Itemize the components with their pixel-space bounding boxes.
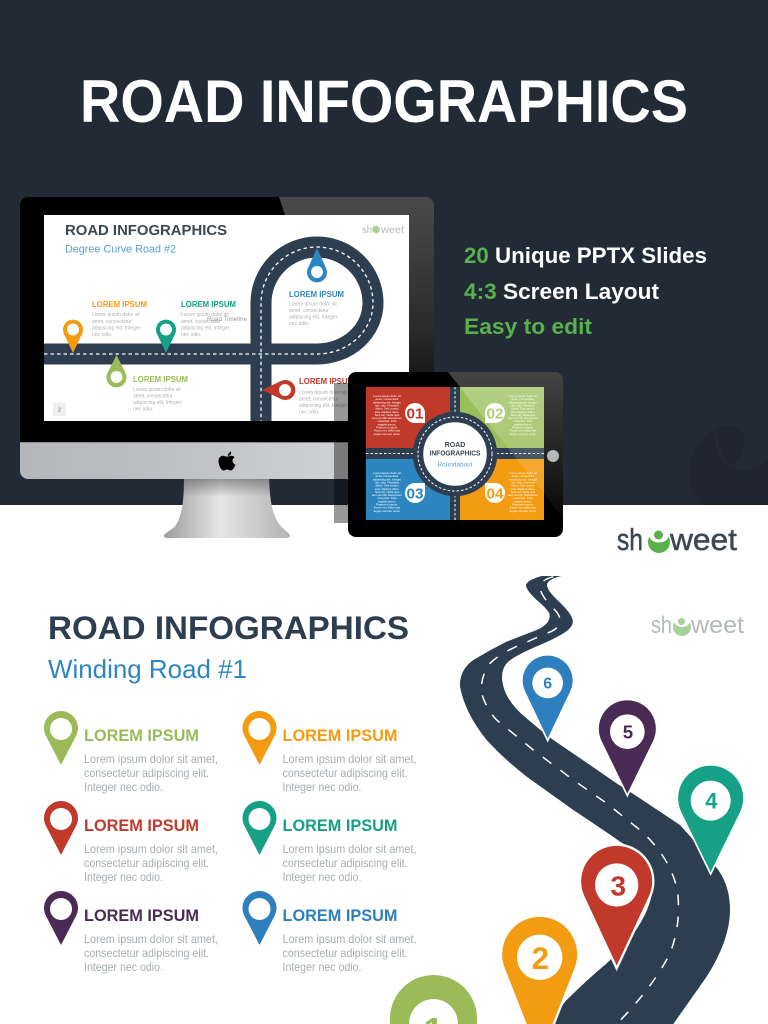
- label: blue: LOREM IPSUM: [289, 290, 344, 299]
- quadrant: green: [455, 387, 544, 454]
- roundabout title: INFOGRAPHICS: [430, 450, 481, 458]
- winding road: [460, 576, 730, 1024]
- page number: 2: [58, 408, 61, 414]
- legend item: blue: Lorem ipsum dolor sit amet,: [282, 932, 416, 946]
- quadrant text: blue: nec odio. Praesent: [375, 480, 399, 484]
- quadrant: red: [366, 387, 455, 454]
- pin 6: 6: [543, 676, 552, 693]
- quadrant text: blue: Lorem ipsum dolor sit: [373, 471, 401, 475]
- legend item: orange: [242, 711, 416, 794]
- legend item: purple: Integer nec odio.: [84, 960, 163, 974]
- watermark logo: [689, 426, 768, 505]
- pin: red: [262, 380, 295, 400]
- pin 4: 4: [705, 789, 718, 814]
- feature: slides: 20 Unique PPTX Slides: [464, 243, 707, 268]
- badge 04: 04: [486, 486, 504, 502]
- quadrant text: red: sagittis ipsum.: [378, 422, 396, 426]
- road surface: [460, 576, 730, 1024]
- quadrant text: blue: sem at nibh elementum: [372, 493, 403, 497]
- quadrant text: orange: amet, consectetur: [512, 474, 535, 478]
- label: orange: Lorem ipsum dolor sit: [92, 312, 140, 318]
- iMac mockup: [20, 197, 434, 538]
- pin: blue: [307, 248, 327, 282]
- legend item: orange: Lorem ipsum dolor sit amet,: [282, 752, 416, 766]
- label: orange: nec odio.: [92, 332, 112, 338]
- tablet home button: [547, 450, 559, 462]
- quadrant text: blue: amet, consectetur: [376, 474, 399, 478]
- tablet glare: [448, 372, 563, 518]
- legend item: green: consectetur adipiscing elit.: [84, 766, 209, 780]
- pin 5: [598, 699, 657, 796]
- small showeet logo: [651, 612, 744, 639]
- quadrant: blue: [366, 454, 455, 520]
- label: blue: [289, 290, 344, 327]
- pin 3: 3: [611, 870, 626, 901]
- showeet logo: [617, 522, 737, 557]
- roundabout title: ROAD: [445, 442, 465, 449]
- label: teal: nec odio.: [181, 332, 201, 338]
- quadrant text: blue: adipiscing elit. Integer: [373, 477, 401, 481]
- showeet logo: sh: [617, 522, 643, 557]
- quadrant text: red: amet, consectetur: [376, 397, 399, 401]
- label: orange: [92, 300, 147, 338]
- legend item: teal: [242, 801, 416, 884]
- slide subtitle: Degree Curve Road #2: [65, 244, 176, 256]
- pin: green: [106, 355, 126, 387]
- quadrant text: green: ante dapibus diam.: [511, 410, 535, 414]
- road centre line: [481, 577, 679, 1024]
- quadrant text: green: Sed nisi. Nulla quis: [511, 413, 536, 417]
- slide on monitor screen: [44, 215, 409, 425]
- quadrant: orange: [455, 454, 544, 520]
- legend pin: [242, 891, 276, 945]
- legend pin: [44, 891, 78, 945]
- label: green: Lorem ipsum dolor sit: [133, 387, 181, 393]
- label: teal: amet, consectetur: [181, 319, 221, 325]
- legend item: blue: consectetur adipiscing elit.: [282, 946, 408, 960]
- feature: layout: 4:3 Screen Layout: [464, 279, 660, 304]
- quadrant text: red: Sed nisi. Nulla quis: [375, 413, 400, 417]
- legend item: green: Lorem ipsum dolor sit amet,: [84, 752, 218, 766]
- dark header background: [0, 0, 768, 505]
- quadrant text: red: imperdiet. Duis: [377, 419, 397, 423]
- quadrant text: red: ante dapibus diam.: [375, 410, 399, 414]
- pin: teal: [156, 320, 176, 353]
- label: red: nec odio.: [299, 410, 319, 416]
- quadrant text: blue: libero. Sed cursus: [375, 484, 399, 488]
- quadrant text: green: amet, consectetur: [512, 397, 535, 401]
- quadrant text: green: sem at nibh elementum: [508, 416, 539, 420]
- legend item: red: LOREM IPSUM: [84, 816, 199, 835]
- quadrant text: red: Lorem ipsum dolor sit: [373, 394, 401, 398]
- legend item: purple: Lorem ipsum dolor sit amet,: [84, 932, 218, 946]
- quadrant text: orange: sagittis ipsum.: [514, 499, 532, 503]
- quadrant text: orange: Praesent mauris.: [512, 502, 534, 506]
- quadrant text: green: imperdiet. Duis: [513, 419, 533, 423]
- label: blue: Lorem ipsum dolor sit: [289, 302, 337, 308]
- legend item: orange: Integer nec odio.: [282, 780, 362, 794]
- slide subheading: Winding Road #1: [48, 654, 247, 684]
- quadrant text: orange: Fusce nec tellus sed: [510, 506, 537, 510]
- quadrant text: blue: sagittis ipsum.: [378, 499, 396, 503]
- legend item: blue: Integer nec odio.: [282, 960, 362, 974]
- logo icon: [673, 617, 691, 636]
- legend item: purple: LOREM IPSUM: [84, 906, 199, 925]
- badge 02: 02: [486, 406, 504, 422]
- legend item: red: Integer nec odio.: [84, 870, 163, 884]
- legend item: teal: Lorem ipsum dolor sit amet,: [282, 842, 416, 856]
- quadrant text: blue: Sed nisi. Nulla quis: [375, 490, 400, 494]
- roundabout roads: [366, 387, 544, 520]
- label: green: amet, consectetur: [133, 394, 173, 400]
- legend item: blue: [242, 891, 416, 974]
- label: green: nec odio.: [133, 406, 153, 412]
- legend pin: [242, 711, 276, 765]
- legend item: green: [44, 711, 218, 794]
- quadrant text: red: libero. Sed cursus: [375, 407, 399, 411]
- label: teal: adipiscing elit. Integer: [181, 326, 230, 332]
- pin: orange: [63, 320, 83, 353]
- quadrant text: green: Fusce nec tellus sed: [510, 429, 537, 433]
- legend item: red: consectetur adipiscing elit.: [84, 856, 209, 870]
- pin 2: 2: [532, 941, 549, 976]
- quadrant text: green: augue semper porta.: [510, 432, 537, 436]
- badge 01: 01: [406, 406, 424, 422]
- label: blue: nec odio.: [289, 321, 309, 327]
- label: green: adipiscing elit. Integer: [133, 400, 182, 406]
- legend item: teal: Integer nec odio.: [282, 870, 362, 884]
- label: teal: [181, 300, 236, 338]
- legend item: green: Integer nec odio.: [84, 780, 163, 794]
- quadrant text: green: Lorem ipsum dolor sit: [509, 394, 537, 398]
- curve road: [44, 247, 373, 425]
- monitor stand: [164, 479, 290, 538]
- slide logo: weet: [380, 224, 404, 236]
- quadrant text: blue: Fusce nec tellus sed: [374, 506, 401, 510]
- pin 5: 5: [623, 721, 633, 742]
- legend item: teal: LOREM IPSUM: [282, 816, 398, 835]
- small showeet logo: sh: [651, 612, 672, 639]
- tablet body: [348, 372, 563, 537]
- quadrant text: green: adipiscing elit. Integer: [509, 400, 537, 404]
- label: orange: adipiscing elit. Integer: [92, 326, 141, 332]
- legend item: orange: LOREM IPSUM: [282, 726, 398, 745]
- legend item: teal: consectetur adipiscing elit.: [282, 856, 408, 870]
- quadrant text: orange: Lorem ipsum dolor sit: [509, 471, 537, 475]
- title: ROAD INFOGRAPHICS: [80, 68, 688, 135]
- quadrant text: orange: libero. Sed cursus: [511, 484, 535, 488]
- quadrant text: red: Fusce nec tellus sed: [374, 429, 401, 433]
- badge 01: [405, 403, 425, 423]
- badge 03: [405, 483, 425, 503]
- quadrant text: blue: Praesent mauris.: [376, 502, 398, 506]
- quadrant text: red: augue semper porta.: [374, 432, 401, 436]
- label: red: LOREM IPSUM: [299, 377, 354, 386]
- legend item: blue: LOREM IPSUM: [282, 906, 398, 925]
- pin 4: [677, 765, 744, 874]
- stray timeline label: Road Timeline: [207, 316, 247, 323]
- label: red: Lorem ipsum dolor sit: [299, 390, 347, 396]
- label: orange: LOREM IPSUM: [92, 300, 147, 309]
- label: teal: Lorem ipsum dolor sit: [181, 312, 229, 318]
- monitor bezel: [20, 197, 434, 479]
- small showeet logo: weet: [690, 612, 744, 639]
- map pins on road: [501, 655, 744, 1024]
- legend item: purple: consectetur adipiscing elit.: [84, 946, 209, 960]
- quadrant text: blue: augue semper porta.: [374, 509, 401, 513]
- quadrant text: red: adipiscing elit. Integer: [373, 400, 401, 404]
- quadrant text: green: sagittis ipsum.: [514, 422, 532, 426]
- slide logo: [362, 224, 404, 236]
- quadrant text: red: Praesent mauris.: [376, 426, 398, 430]
- quadrant text: green: Praesent mauris.: [512, 426, 534, 430]
- legend pin: [44, 801, 78, 855]
- label: red: adipiscing elit. Integer: [299, 403, 348, 409]
- pin 6: [522, 655, 573, 741]
- label: red: amet, consectetur: [299, 396, 339, 402]
- legend item: green: LOREM IPSUM: [84, 726, 199, 745]
- badge 03: 03: [406, 486, 424, 502]
- quadrant text: green: nec odio. Praesent: [511, 403, 535, 407]
- page number: [53, 403, 66, 416]
- feature list: [464, 243, 707, 339]
- roundabout title: [430, 442, 481, 468]
- pin 2: [501, 916, 578, 1024]
- slide title: ROAD INFOGRAPHICS: [65, 223, 227, 239]
- quadrant text: blue: ante dapibus diam.: [375, 487, 399, 491]
- quadrant text: orange: imperdiet. Duis: [513, 496, 533, 500]
- label: blue: adipiscing elit. Integer: [289, 314, 338, 320]
- quadrant text: orange: nec odio. Praesent: [511, 480, 535, 484]
- legend item: purple: [44, 891, 218, 974]
- legend item: red: [44, 801, 218, 884]
- quadrant text: orange: augue semper porta.: [510, 509, 537, 513]
- showeet logo: weet: [669, 522, 737, 557]
- tablet mockup: [348, 372, 563, 537]
- quadrant text: orange: adipiscing elit. Integer: [509, 477, 537, 481]
- badge 04: [485, 483, 505, 503]
- legend item: orange: consectetur adipiscing elit.: [282, 766, 408, 780]
- label: green: LOREM IPSUM: [133, 375, 188, 384]
- roundabout title: Roundabout: [438, 462, 473, 468]
- label: orange: amet, consectetur: [92, 319, 132, 325]
- label: teal: LOREM IPSUM: [181, 300, 236, 309]
- feature: editing: Easy to edit: [464, 314, 593, 339]
- quadrant text: green: libero. Sed cursus: [511, 407, 535, 411]
- pin 1: [390, 975, 477, 1024]
- tablet drop shadow: [334, 383, 348, 523]
- label: red: [299, 377, 354, 416]
- logo icon: [648, 530, 670, 553]
- quadrant text: red: sem at nibh elementum: [372, 416, 403, 420]
- label: blue: amet, consectetur: [289, 308, 329, 314]
- slide logo: sh: [362, 224, 372, 236]
- badge 02: [485, 403, 505, 423]
- quadrant text: blue: imperdiet. Duis: [377, 496, 397, 500]
- label: green: [133, 375, 188, 412]
- quadrant text: orange: sem at nibh elementum: [508, 493, 539, 497]
- pin 3: [580, 845, 653, 968]
- quadrant text: orange: Sed nisi. Nulla quis: [511, 490, 536, 494]
- legend pin: [242, 801, 276, 855]
- icon: apple logo: [218, 452, 235, 470]
- slide heading: ROAD INFOGRAPHICS: [48, 610, 409, 646]
- quadrant text: red: nec odio. Praesent: [375, 403, 399, 407]
- legend item: red: Lorem ipsum dolor sit amet,: [84, 842, 218, 856]
- quadrant text: orange: ante dapibus diam.: [511, 487, 535, 491]
- legend pin: [44, 711, 78, 765]
